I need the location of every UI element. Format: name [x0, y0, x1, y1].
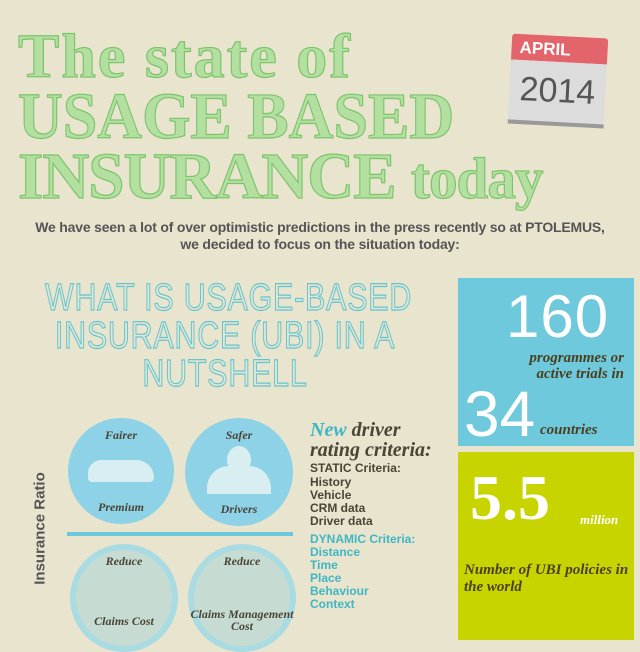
circle: safer drivers: [185, 418, 293, 526]
panel: policies: 5.5: [470, 462, 550, 533]
title: INSURANCE today: [18, 140, 542, 213]
text: driver rating criteria: DYNAMIC Criteria:: [310, 532, 415, 546]
text: driver rating criteria: Distance: [310, 545, 360, 559]
panel: policies: Number of UBI policies in the world: [464, 562, 628, 595]
subtitle: [35, 219, 605, 252]
text: driver rating criteria: Behaviour: [310, 584, 369, 598]
circle: claims cost: [70, 544, 178, 652]
subtitle: we decided to focus on the situation today:: [180, 236, 460, 252]
circle: fairer premium: Premium: [98, 500, 144, 514]
panel: programmes: 34: [464, 378, 535, 450]
panel: programmes: 160: [506, 283, 609, 350]
text: driver rating criteria: CRM data: [310, 501, 365, 515]
panel: programmes: countries: [540, 422, 598, 438]
circle: safer drivers: Safer: [226, 428, 252, 442]
panel: policies: [458, 452, 634, 640]
circle: claims management cost: Claims Management Cost: [190, 607, 294, 633]
circle: claims management cost: [188, 544, 296, 652]
text: driver rating criteria: [310, 419, 432, 611]
heading: what is UBI: [44, 282, 410, 388]
text: driver rating criteria: rating criteria:: [310, 439, 432, 461]
divider: [67, 532, 293, 536]
text: driver rating criteria: History: [310, 475, 351, 489]
circle: fairer premium: [68, 418, 174, 524]
icon: calendar: 2014: [519, 70, 596, 112]
panel: policies: million: [580, 512, 618, 527]
title: The state of: [18, 23, 352, 91]
axis label: Insurance Ratio: [32, 472, 48, 585]
title: USAGE BASED: [18, 80, 454, 153]
text: driver rating criteria: Driver data: [310, 514, 373, 528]
subtitle: We have seen a lot of over optimistic predictions in the press recently so at PTOLEMUS,: [35, 219, 605, 235]
text: driver rating criteria: New driver: [310, 419, 401, 441]
icon: calendar: [508, 34, 608, 128]
circle: safer drivers: Drivers: [221, 502, 257, 516]
text: driver rating criteria: Context: [310, 597, 355, 611]
panel: programmes: programmes or: [529, 350, 624, 366]
panel: programmes: [458, 278, 634, 446]
title: [18, 23, 544, 213]
circle: claims cost: Reduce: [106, 554, 142, 568]
circle: fairer premium: Fairer: [105, 428, 137, 442]
icon: calendar: APRIL: [519, 38, 571, 60]
text: driver rating criteria: STATIC Criteria:: [310, 461, 401, 475]
text: driver rating criteria: Place: [310, 571, 341, 585]
panel: programmes: active trials in: [536, 366, 624, 382]
text: driver rating criteria: Time: [310, 558, 338, 572]
circle: claims management cost: Reduce: [224, 554, 260, 568]
circle: claims cost: Claims Cost: [94, 614, 154, 628]
text: driver rating criteria: Vehicle: [310, 488, 351, 502]
